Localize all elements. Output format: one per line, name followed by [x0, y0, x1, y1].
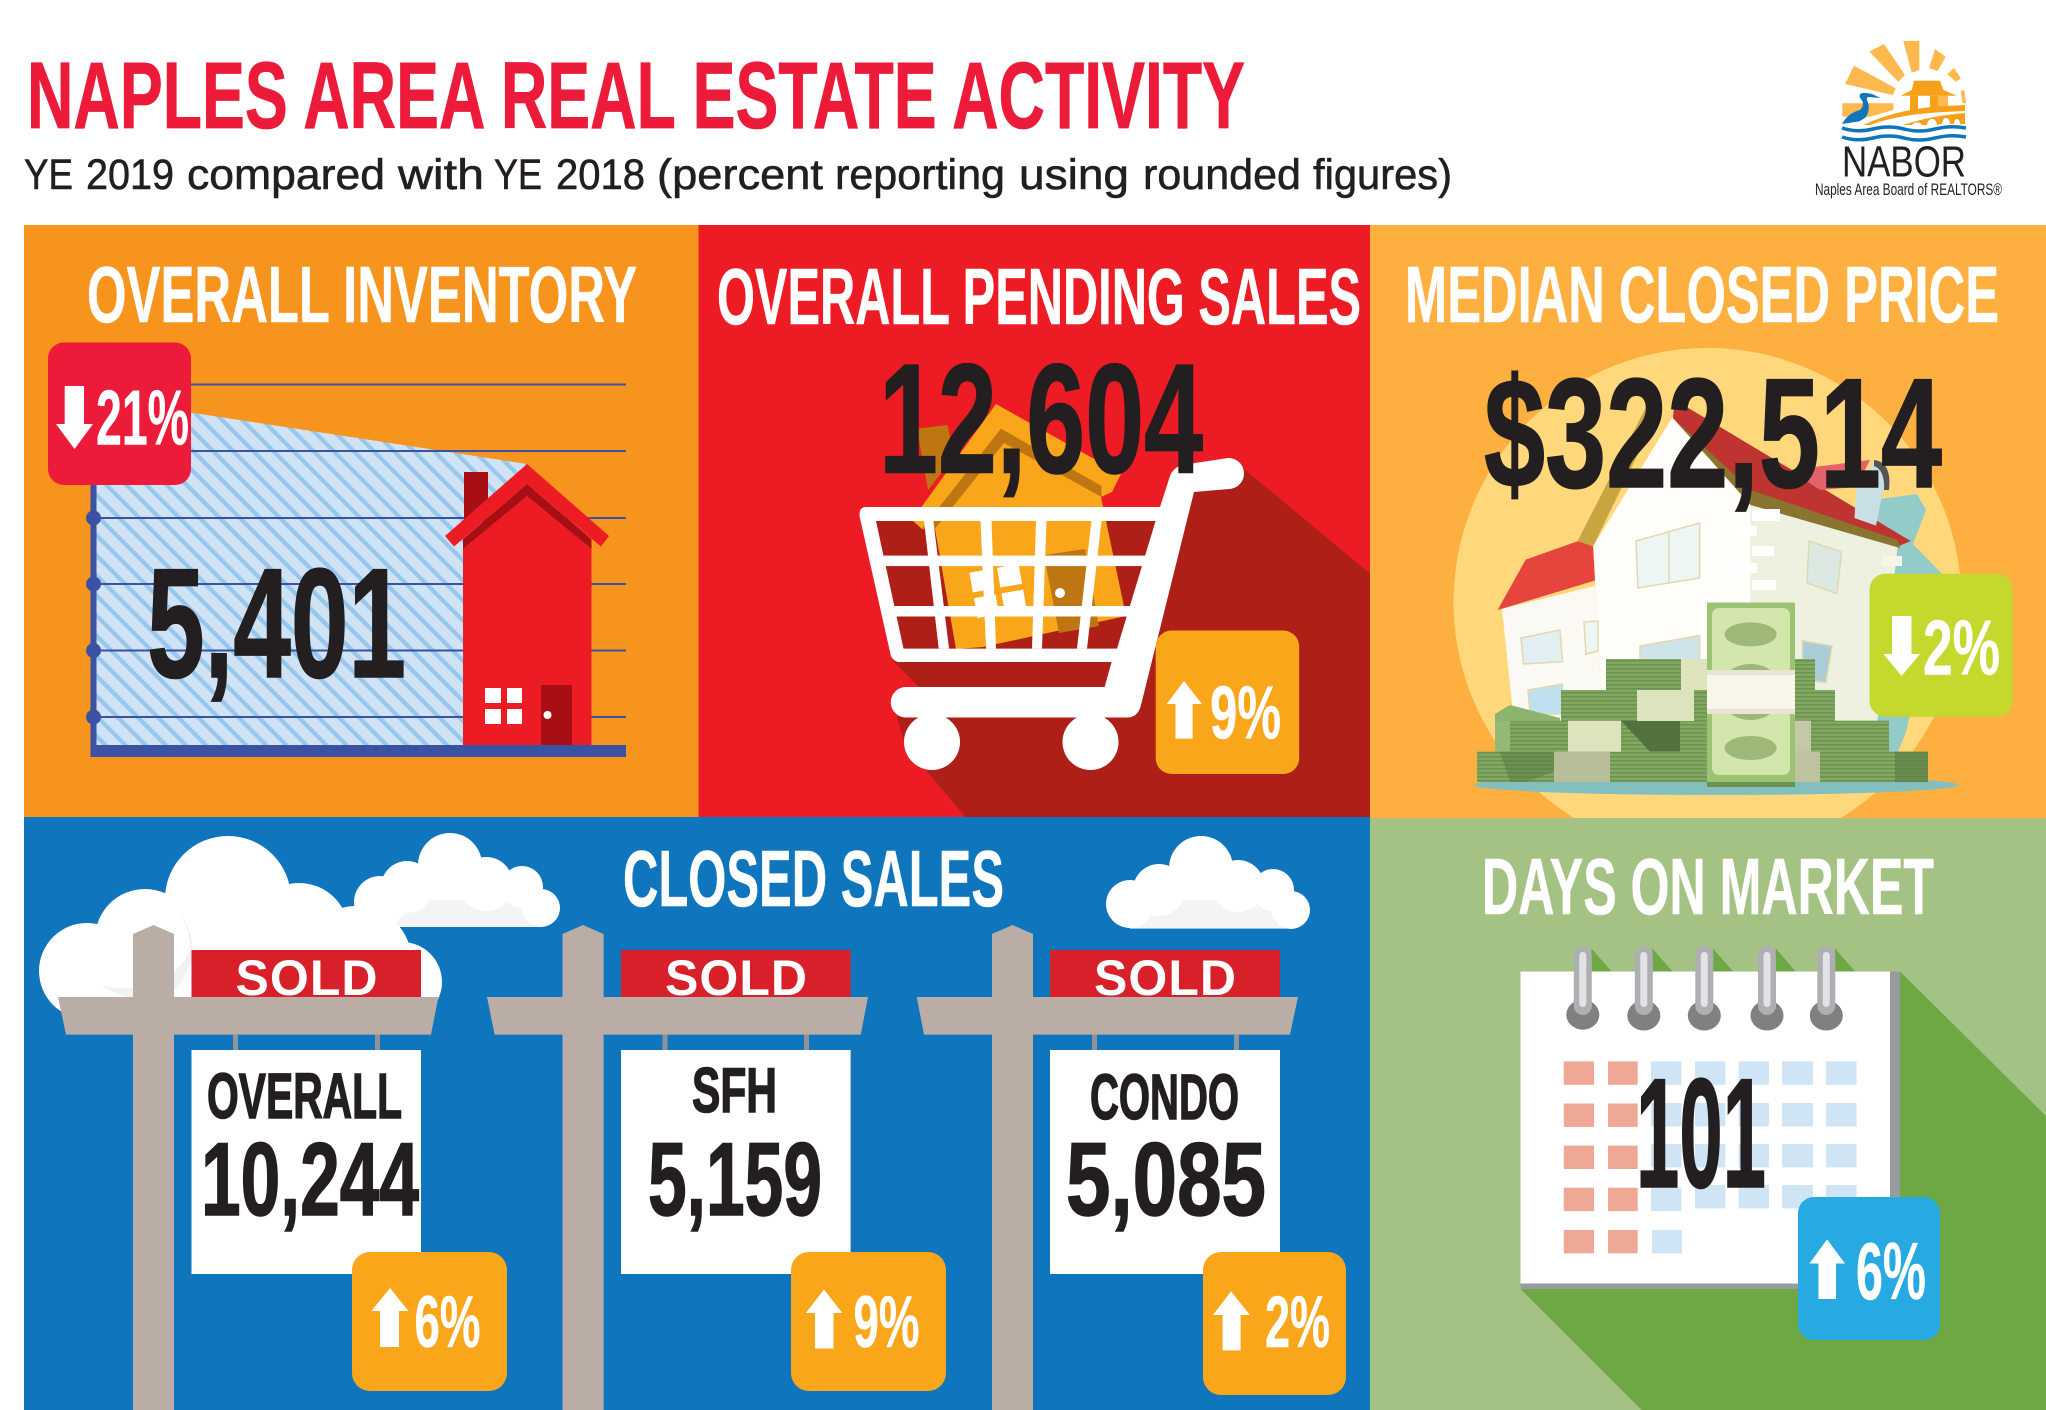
panel: days on market [1370, 818, 2046, 1410]
icon: house [445, 464, 609, 745]
badge: down 2%: 2% [1923, 604, 2000, 692]
cloud: middle [354, 833, 560, 928]
panel: overall pending sales [698, 225, 1370, 818]
panel: median closed price [1370, 225, 2046, 818]
subtitle [24, 151, 1452, 199]
area chart [86, 384, 626, 757]
heading: overall inventory: OVERALL INVENTORY [87, 250, 637, 339]
badge: down 2% [1870, 574, 2012, 717]
badge: up 9%: 9% [854, 1282, 920, 1363]
title: NAPLES AREA REAL ESTATE ACTIVITY [27, 43, 1245, 149]
badge: up 6%: 6% [1856, 1227, 1926, 1317]
sign: condo: SOLD [1094, 950, 1236, 1006]
subtitle: using [1019, 151, 1129, 199]
badge: up 6% [1798, 1197, 1940, 1340]
badge: down 21% [48, 342, 191, 485]
sign: SFH: SOLD [665, 950, 807, 1006]
subtitle: figures) [1313, 151, 1452, 199]
sign: condo [917, 925, 1346, 1410]
subtitle: 2018 [556, 151, 645, 199]
cloud: left [39, 836, 442, 1022]
logo: NABOR [1815, 41, 2002, 199]
sign: SFH: 5,159 [648, 1122, 822, 1238]
value: 5,401: 5,401 [147, 537, 406, 711]
cloud: right [1106, 836, 1310, 929]
icon: calendar [1520, 946, 1900, 1289]
illustration: upright banknote [1707, 602, 1795, 787]
subtitle: (percent [657, 151, 823, 199]
sign: condo: 5,085 [1066, 1122, 1266, 1238]
heading: overall pending sales: OVERALL PENDING SALES [717, 252, 1361, 341]
badge: up 2%: 2% [1265, 1282, 1330, 1363]
logo: NABOR: NABOR [1842, 138, 1966, 186]
icon: price tag house [912, 404, 1126, 649]
sun disc [1453, 348, 1962, 818]
badge: up 2% [1203, 1252, 1346, 1395]
subtitle: 2019 [86, 151, 174, 199]
subtitle: rounded [1143, 151, 1301, 199]
sign: overall: OVERALL [207, 1060, 402, 1132]
illustration: house [1498, 398, 1943, 774]
subtitle: YE [24, 151, 73, 199]
sign: overall [58, 925, 507, 1410]
badge: down 21%: 21% [96, 374, 189, 462]
badge: up 6%: 6% [414, 1282, 480, 1363]
value: 12,604: 12,604 [879, 332, 1203, 506]
heading: closed sales: CLOSED SALES [623, 834, 1004, 923]
sign: SFH [487, 925, 946, 1410]
panel: days on market: 101 [1636, 1047, 1766, 1221]
ground shadow [1474, 775, 1958, 795]
badge: up 6% [352, 1252, 507, 1391]
subtitle: compared [187, 151, 385, 199]
panel: overall inventory [24, 225, 699, 818]
calendar shadow [1520, 948, 2046, 1410]
sign: condo: CONDO [1090, 1061, 1239, 1133]
sign: SFH: SFH [692, 1056, 777, 1126]
panel: closed sales [24, 817, 1370, 1410]
subtitle: with [397, 151, 484, 199]
sign: overall: 10,244 [201, 1122, 419, 1238]
illustration: money stacks [1477, 659, 1928, 782]
subtitle: YE [494, 151, 542, 199]
icon: shopping cart [859, 458, 1244, 770]
subtitle: reporting [835, 151, 1005, 199]
badge: up 9% [791, 1252, 946, 1391]
badge: up 9%: 9% [1210, 670, 1281, 754]
badge: up 9% [1156, 630, 1299, 774]
sign: overall: SOLD [236, 950, 378, 1006]
cart shadow [876, 469, 1370, 818]
